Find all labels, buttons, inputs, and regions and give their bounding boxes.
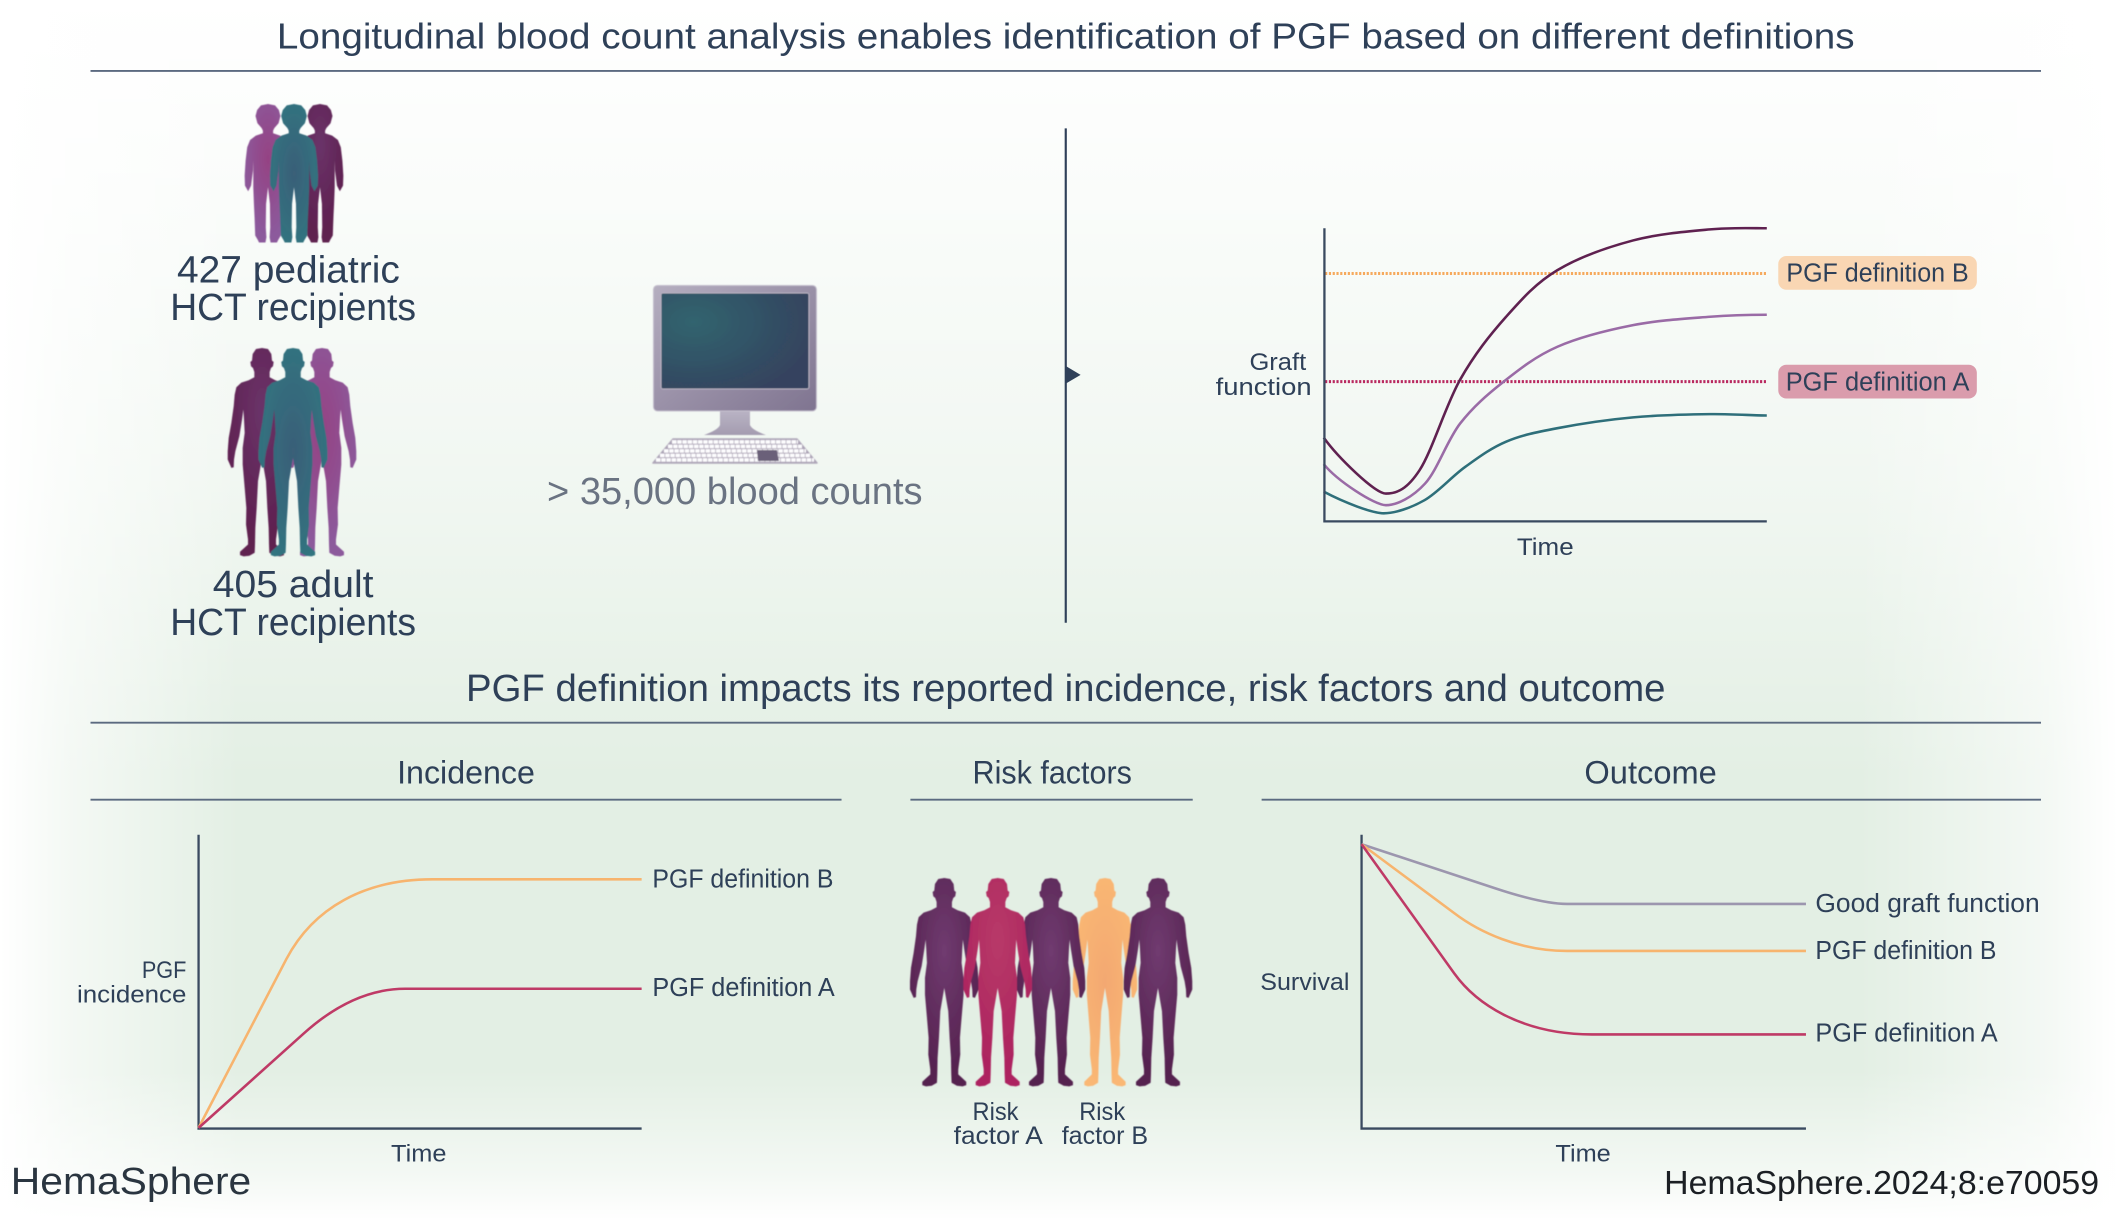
x axis label: Time — [1517, 534, 1574, 561]
heading: section two: PGF definition impacts its reported incidence, risk factors and outcome — [466, 668, 1665, 710]
definition lines — [1325, 274, 1767, 382]
curve: teal — [1324, 414, 1767, 513]
y axis label: PGF — [142, 957, 186, 984]
text: adult recipients: 405 adult — [213, 564, 374, 606]
citation: HemaSphere.2024;8:e70059 — [1664, 1164, 2099, 1202]
figures: risk factor group — [910, 878, 1192, 1086]
text: risk factor labels: factor A — [954, 1122, 1043, 1150]
text: pediatric recipients — [170, 249, 416, 329]
series labels: PGF definition A — [1815, 1017, 1998, 1047]
x axis label: Time — [391, 1141, 446, 1168]
heading: risk factors: Risk factors — [973, 754, 1132, 790]
series labels: PGF definition B — [1815, 935, 1996, 965]
chart: outcome survival — [1260, 835, 2040, 1168]
text: risk factor labels: Risk — [1079, 1098, 1126, 1126]
series labels: Good graft function — [1815, 888, 2040, 918]
text: pediatric recipients: 427 pediatric — [177, 249, 400, 291]
tag: PGF definition B: PGF definition B — [1786, 258, 1969, 288]
y axis label: incidence — [77, 981, 186, 1008]
axes — [1324, 228, 1767, 521]
y axis label: Graft — [1249, 349, 1306, 376]
y axis label — [77, 957, 186, 1008]
y axis label: Survival — [1260, 969, 1349, 996]
text: blood counts: > 35,000 blood counts — [547, 471, 923, 513]
text: adult recipients — [170, 564, 416, 644]
text: risk factor labels: Risk — [973, 1098, 1019, 1126]
text: pediatric recipients: HCT recipients — [170, 287, 416, 329]
icon: desktop computer — [653, 285, 817, 463]
logo: HemaSphere: HemaSphere — [11, 1161, 251, 1203]
series labels: PGF definition A — [652, 972, 835, 1002]
heading: incidence: Incidence — [397, 754, 535, 790]
curve: definition A — [199, 989, 642, 1128]
chart: graft function over time — [1216, 228, 1977, 561]
icon: three adults — [228, 348, 356, 556]
curve: definition B — [1362, 844, 1806, 951]
heading: outcome: Outcome — [1584, 754, 1717, 790]
x axis label: Time — [1555, 1141, 1611, 1168]
axes — [1362, 835, 1806, 1129]
y axis label: function — [1216, 374, 1312, 401]
series labels — [1815, 888, 2040, 1047]
y axis label — [1216, 349, 1312, 401]
tag: PGF definition A: PGF definition A — [1786, 366, 1970, 396]
chart: incidence — [77, 835, 835, 1168]
icon: three children — [245, 104, 343, 243]
axes — [199, 835, 642, 1129]
curve: light purple — [1324, 315, 1767, 505]
series labels — [652, 863, 835, 1002]
text: risk factor labels: factor B — [1062, 1122, 1148, 1150]
series labels: PGF definition B — [652, 863, 833, 893]
arrow: vertical divider — [1066, 128, 1081, 623]
curve: good graft function — [1362, 844, 1806, 904]
curve: definition B — [199, 879, 642, 1128]
text: adult recipients: HCT recipients — [170, 602, 416, 644]
curve: definition A — [1362, 844, 1806, 1034]
text: risk factor labels — [954, 1098, 1148, 1150]
curve: dark plum — [1324, 228, 1767, 494]
title: Longitudinal blood count analysis enables identification of PGF based on different definitions — [277, 16, 1855, 57]
